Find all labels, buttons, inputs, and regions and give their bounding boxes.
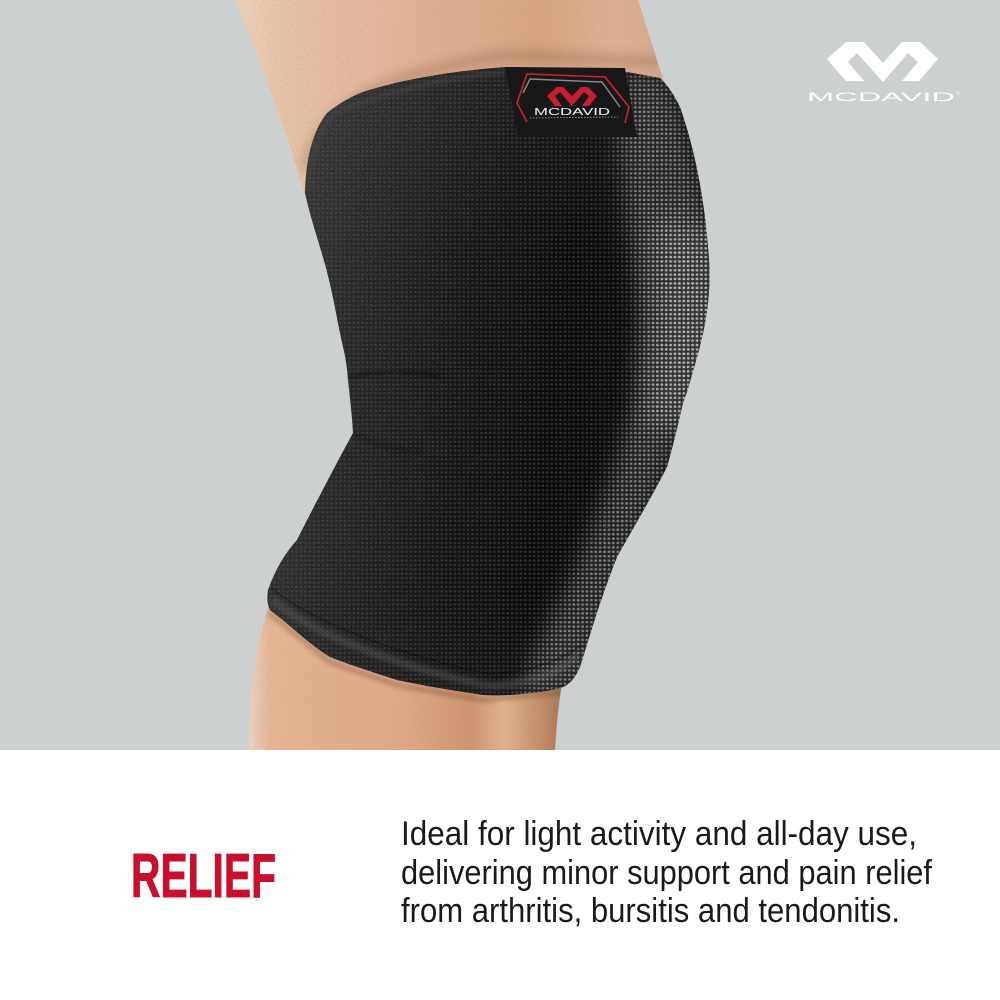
white caption panel <box>0 750 1000 1000</box>
tag red logo <box>547 87 597 106</box>
photo background <box>0 0 1000 750</box>
description text <box>401 815 932 930</box>
tag grey outline <box>523 79 620 107</box>
tag red outline <box>517 74 629 123</box>
sleeve knit texture and lighting <box>260 60 720 710</box>
description text: from arthritis, bursitis and tendonitis. <box>401 892 900 930</box>
McDavid logo <box>807 42 960 104</box>
tag brand name: MCDAVID <box>534 106 611 118</box>
sleeve body <box>267 67 710 695</box>
skin pores and shading <box>235 0 665 750</box>
description text: delivering minor support and pain relief <box>401 854 932 892</box>
top hem <box>309 72 505 190</box>
tag dotted line <box>530 117 618 118</box>
bottom hem <box>272 600 578 686</box>
heading: RELIEF: RELIEF <box>131 842 276 911</box>
leg: thigh skin <box>235 0 664 195</box>
knee sleeve <box>260 60 720 710</box>
leg: lower leg skin <box>249 600 565 750</box>
knee crease <box>346 372 440 378</box>
description text: Ideal for light activity and all-day use, <box>401 815 917 853</box>
logo wordmark: MCDAVID <box>807 90 956 104</box>
sleeve label tag <box>505 67 637 137</box>
logo mark <box>827 42 938 82</box>
tag background <box>505 67 637 137</box>
logo registered mark: ® <box>956 90 960 97</box>
